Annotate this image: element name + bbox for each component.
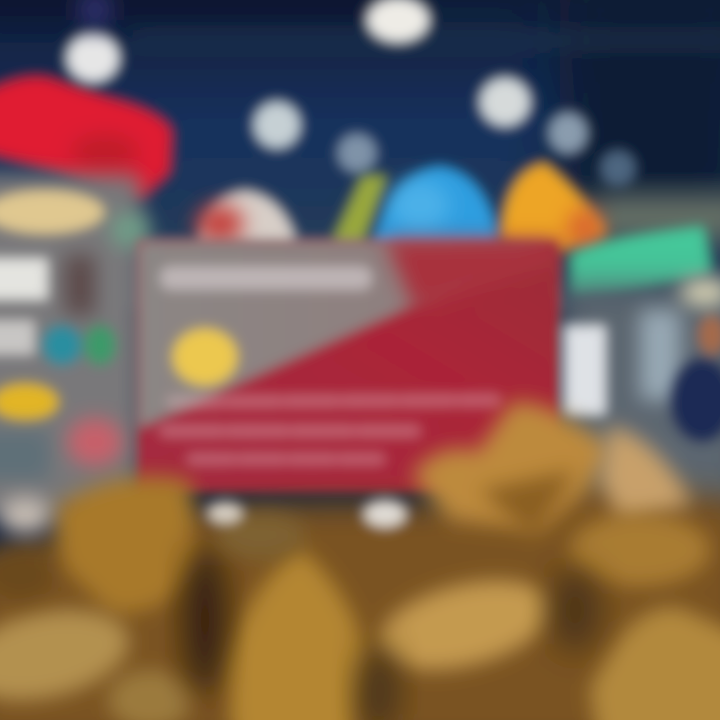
left shelves of goods xyxy=(0,175,150,515)
market ceiling background xyxy=(0,0,720,310)
card number lines xyxy=(165,400,495,459)
hanging ceiling lights xyxy=(66,0,636,186)
card grey diagonal panel xyxy=(137,240,555,430)
golden pastries foreground xyxy=(0,402,720,720)
card chip xyxy=(172,328,238,386)
colourful stall canopies xyxy=(196,162,712,294)
right side shoppers xyxy=(560,278,720,515)
card title text xyxy=(160,266,372,290)
credit card xyxy=(137,240,559,492)
red stall awning xyxy=(0,76,172,200)
